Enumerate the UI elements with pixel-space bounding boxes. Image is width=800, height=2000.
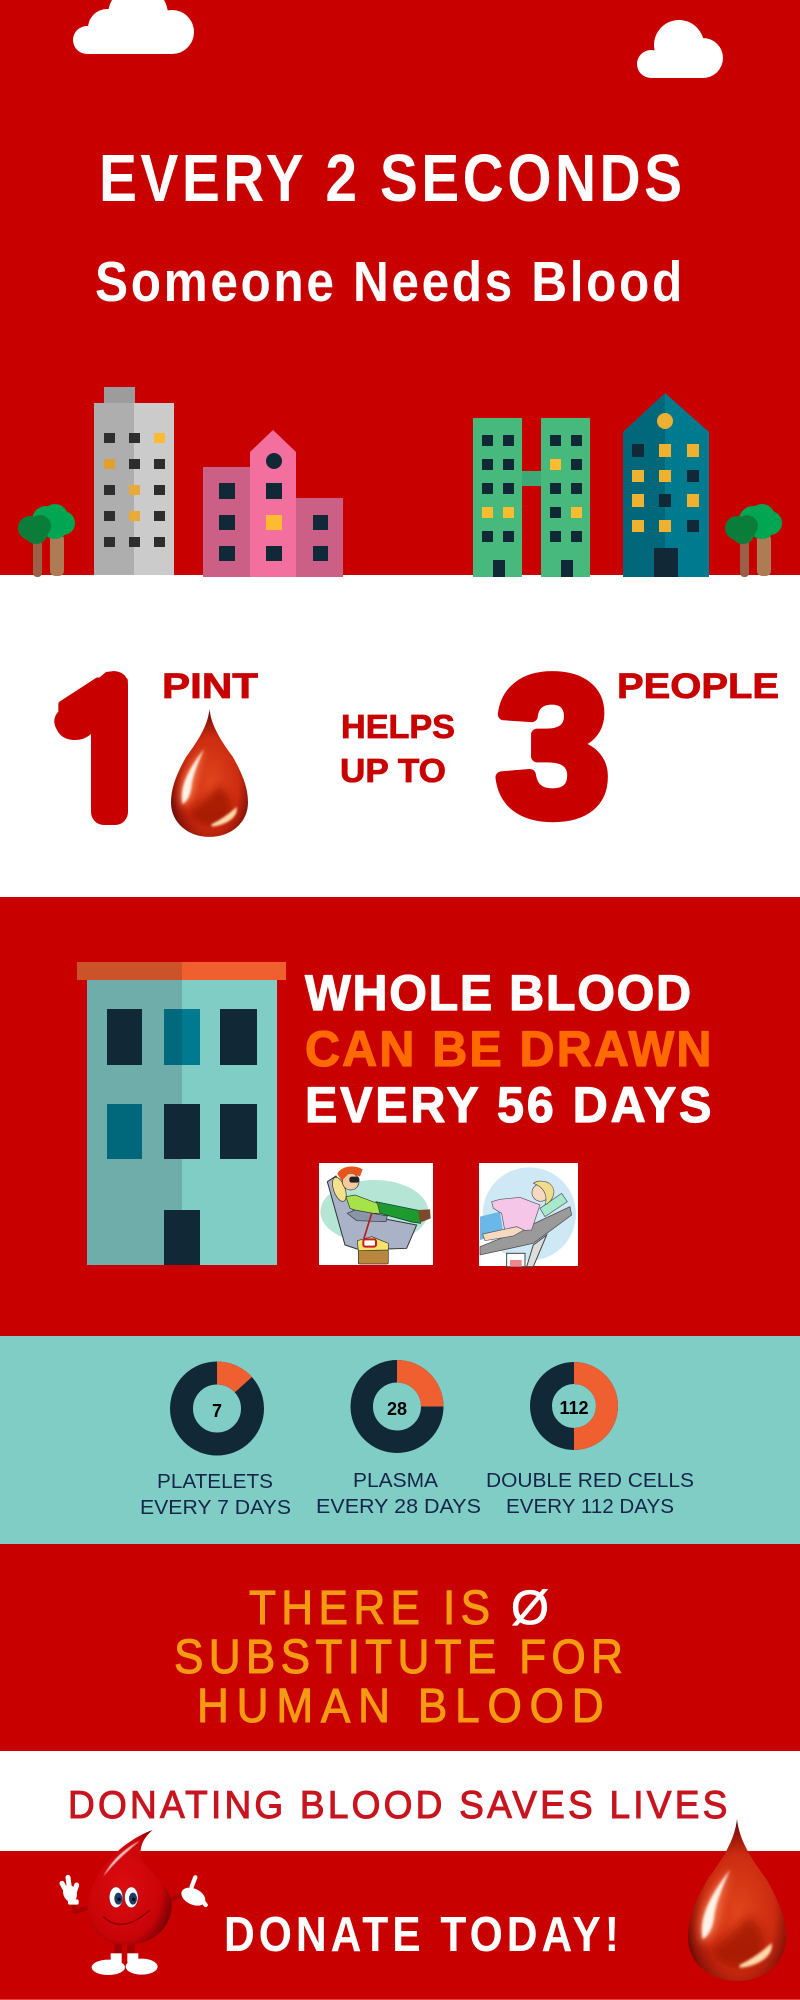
- glyph: slashed zero: Ø: [511, 1582, 549, 1635]
- chart: plasma donut: [362, 1371, 432, 1442]
- label: people: PEOPLE: [617, 667, 779, 706]
- chart: double red cells donut: 112: [559, 1398, 589, 1418]
- panel: donating saves lives: [0, 1751, 800, 1851]
- label: platelets: EVERY 7 DAYS: [140, 1497, 291, 1519]
- icon: large blood drop: [688, 1819, 786, 1981]
- illustration: man donating blood: [319, 1163, 433, 1265]
- label: plasma: [316, 1470, 481, 1518]
- panel: donation frequency: [0, 1336, 800, 1544]
- text: whole blood: WHOLE BLOOD: [305, 965, 691, 1021]
- text: there is no substitute for human blood: THERE IS: [249, 1580, 490, 1634]
- icon: cloud left: [73, 0, 194, 54]
- icon: teal building: [77, 962, 286, 1265]
- label: plasma: PLASMA: [353, 1470, 439, 1492]
- label: platelets: PLATELETS: [157, 1471, 273, 1493]
- title: every 2 seconds: EVERY 2 SECONDS: [99, 142, 682, 216]
- text: donating blood saves lives: DONATING BLOOD SAVES LIVES: [68, 1784, 727, 1827]
- numeral: 3: 3: [497, 637, 609, 856]
- chart: platelets donut: [182, 1373, 252, 1444]
- panel: one pint helps three people: [0, 575, 800, 897]
- chart: plasma donut: 28: [387, 1399, 407, 1419]
- text: donate today: DONATE TODAY!: [224, 1906, 619, 1962]
- text: helps up to: [340, 708, 455, 789]
- illustration: woman donating blood: [479, 1163, 578, 1267]
- numeral: 1: [54, 671, 128, 825]
- subtitle: someone needs blood: Someone Needs Blood: [95, 251, 682, 314]
- panel: no substitute: [0, 1544, 800, 1751]
- label: double red cells: DOUBLE RED CELLS: [486, 1470, 694, 1492]
- label: platelets: [140, 1471, 291, 1519]
- text: there is no substitute for human blood: [174, 1580, 623, 1732]
- icon: blue gabled building: [623, 393, 709, 577]
- label: plasma: EVERY 28 DAYS: [316, 1496, 481, 1518]
- icon: cloud right: [637, 20, 723, 78]
- text: helps up to: UP TO: [340, 752, 446, 789]
- label: double red cells: [486, 1470, 694, 1518]
- icon: green twin towers: [473, 418, 590, 577]
- chart: double red cells donut: [541, 1373, 607, 1439]
- illustration: city skyline: [18, 387, 782, 577]
- chart: platelets donut: 7: [212, 1401, 222, 1421]
- text: helps up to: HELPS: [341, 708, 455, 745]
- label: double red cells: EVERY 112 DAYS: [506, 1496, 674, 1518]
- icon: blood drop mascot: [61, 1830, 208, 1975]
- text: can be drawn: CAN BE DRAWN: [305, 1021, 711, 1077]
- text: there is no substitute for human blood: HUMAN BLOOD: [197, 1678, 604, 1732]
- label: pint: PINT: [162, 667, 258, 706]
- panel: donate today: [0, 1851, 800, 2000]
- text: every 56 days: EVERY 56 DAYS: [305, 1077, 711, 1133]
- icon: grey tower: [94, 387, 174, 575]
- icon: blood drop: [171, 709, 248, 837]
- text: there is no substitute for human blood: SUBSTITUTE FOR: [174, 1629, 623, 1683]
- icon: right trees: [725, 504, 782, 577]
- background: red sky panel: [0, 0, 800, 575]
- icon: pink building: [203, 430, 343, 577]
- icon: left trees: [18, 504, 75, 577]
- panel: whole blood: [0, 897, 800, 1336]
- numeral: 1: 1: [47, 635, 164, 870]
